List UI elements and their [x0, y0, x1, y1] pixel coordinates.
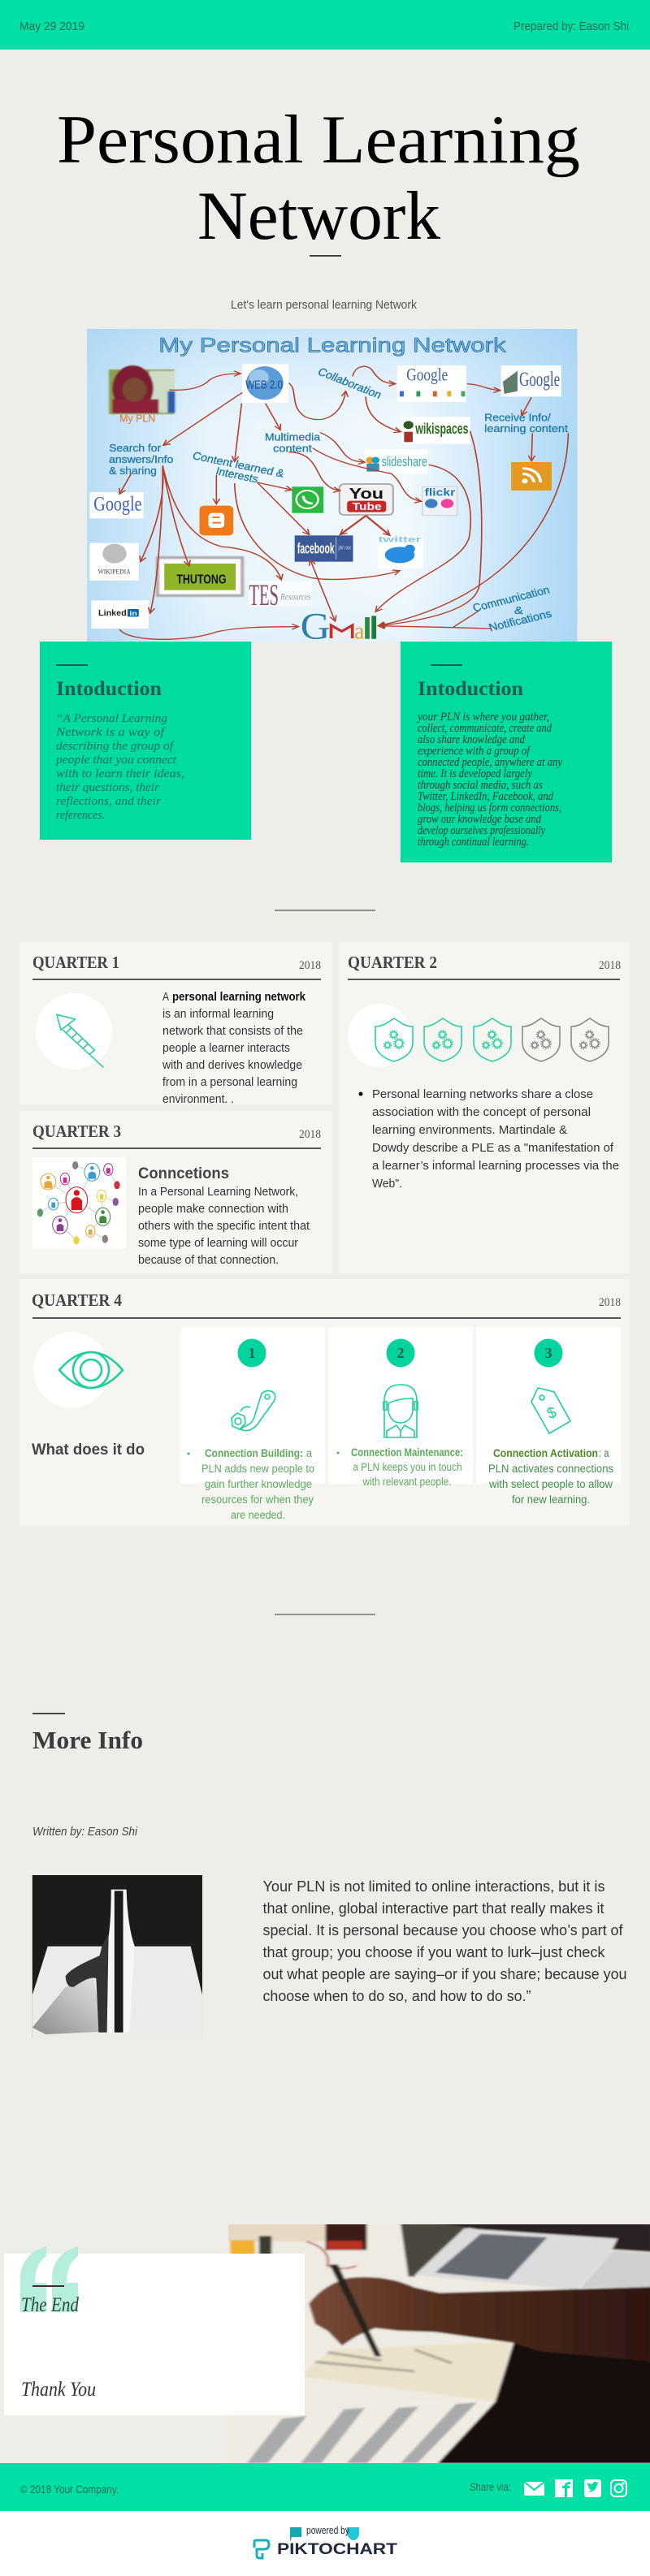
footer bar: Share via:: [470, 2480, 511, 2493]
logo tiles: Resources: [280, 591, 311, 602]
diagram title: My Personal Learning Network: [158, 334, 506, 357]
icon: facebook: [555, 2479, 573, 2497]
panel: quarter 3: some type of learning will occur: [138, 1236, 298, 1250]
panel: quarter 3: others with the specific intent that: [138, 1219, 310, 1233]
logo tiles: Google: [519, 369, 560, 391]
step 2: connection maintenance: 2: [396, 1345, 405, 1361]
diagram labels: Content learned &: [191, 451, 285, 480]
photo: hand writing at desk: [224, 2219, 650, 2466]
diagram: my personal learning network: [87, 329, 577, 647]
icon: instagram: [611, 2480, 626, 2496]
panel: quarter 2: 2018: [599, 959, 621, 972]
panel: introduction left: Network is a way of: [55, 726, 166, 739]
logo tiles: G: [301, 606, 330, 647]
logo tiles: in: [129, 610, 137, 618]
diagram labels: &: [514, 605, 523, 617]
panel: introduction right: blogs, helping us form connections,: [418, 802, 561, 815]
footer bar: © 2018 Your Company.: [20, 2483, 119, 2496]
panel: quarter 1: QUARTER 1: [32, 953, 119, 972]
header bar: May 29 2019: [20, 19, 84, 33]
panel: introduction left: reflections, and their: [56, 795, 161, 808]
logo tiles: flickr: [425, 486, 456, 498]
footer bar: [0, 2463, 650, 2511]
panel: introduction left: references.: [56, 809, 105, 822]
panel: introduction right: Twitter, LinkedIn, Facebook, and: [418, 790, 553, 803]
panel: quarter 2: Dowdy describe a PLE as a "manifestation of: [372, 1141, 614, 1155]
panel: introduction right: your PLN is where you gather,: [416, 711, 549, 724]
diagram labels: Receive Info/: [484, 413, 552, 424]
subtitle: Let's learn personal learning Network: [231, 299, 418, 312]
logo tiles: Google: [406, 365, 448, 385]
logo tiles: Google: [93, 493, 141, 516]
text block: more info quote: Your PLN is not limited to online interactions, but it is: [263, 1878, 604, 1895]
panel: introduction right: also share knowledge and: [418, 733, 525, 746]
icon: twitter: [584, 2479, 601, 2497]
step 1: connection building: are needed.: [231, 1509, 285, 1521]
panel: quarter 1: with and derives knowledge: [162, 1058, 302, 1072]
header bar: Prepared by: Eason Shi: [514, 19, 629, 33]
text block: more info quote: that group; you choose if you want to lurk–just check: [263, 1944, 605, 1960]
diagram labels: Collaboration: [315, 366, 384, 401]
panel: quarter 1: from in a personal learning: [162, 1075, 297, 1089]
step 1: connection building: a: [306, 1447, 312, 1459]
panel: introduction right: experience with a group of: [418, 745, 531, 758]
panel: quarter 4: What does it do: [32, 1441, 145, 1459]
diagram labels: Communication: [471, 585, 552, 615]
logo tiles: TES: [249, 578, 279, 612]
footer logo area: PIKTOCHART: [277, 2541, 397, 2558]
text block: more info quote: choose when to do so, and how to do so.”: [263, 1988, 531, 2004]
step 3: connection activation: : a: [599, 1447, 609, 1459]
panel: quarter 3: [20, 1111, 332, 1273]
step 3: connection activation: Connection Activation: [493, 1447, 598, 1459]
logo tiles: THUTONG: [176, 572, 227, 586]
text block: more info quote: special. It is personal because you choose who’s part of: [263, 1922, 623, 1938]
logo tiles: WEB 2.0: [245, 378, 283, 391]
panel: quarter 3: because of that connection.: [138, 1253, 279, 1267]
panel: quarter 3: QUARTER 3: [32, 1122, 121, 1141]
step 3: connection activation: with select people to allow: [488, 1478, 613, 1490]
diagram labels: learning content: [484, 423, 569, 435]
panel: introduction left: people that you connect: [55, 754, 177, 767]
panel: quarter 1: [20, 942, 332, 1106]
icon: people network: [32, 1157, 126, 1249]
panel: quarter 3: Conncetions: [138, 1165, 229, 1182]
text block: more info quote: out what people are saying–or if you share; because you: [263, 1966, 627, 1982]
step 3: connection activation: for new learning.: [512, 1493, 590, 1506]
panel: quarter 3: 2018: [299, 1128, 321, 1141]
logo tiles: wikispaces: [415, 421, 469, 437]
panel: quarter 2: Personal learning networks share a close: [372, 1087, 593, 1101]
step 3: connection activation: $: [544, 1404, 559, 1423]
panel: introduction right: collect, communicate, create and: [418, 722, 552, 735]
icon: rating shields: [375, 1018, 609, 1061]
step 1: connection building: [180, 1327, 325, 1521]
panel: quarter 2: QUARTER 2: [348, 953, 437, 972]
step 2: connection maintenance: Connection Maintenance:: [351, 1446, 463, 1459]
panel: quarter 1: A: [162, 990, 169, 1004]
step 2: connection maintenance: a PLN keeps you in touch: [353, 1461, 462, 1473]
panel: introduction right: through social media, such as: [418, 779, 543, 792]
step 3: connection activation: [476, 1327, 621, 1506]
closing card: [4, 2246, 305, 2415]
panel: quarter 3: people make connection with: [138, 1202, 288, 1216]
logo tiles: join our: [338, 544, 351, 551]
diagram labels: Notifications: [488, 608, 553, 634]
diagram labels: content: [273, 443, 313, 455]
diagram labels: Search for: [109, 443, 161, 455]
icon: eye: [59, 1352, 123, 1388]
panel: quarter 4: [20, 1279, 630, 1525]
title: Network: [197, 178, 440, 254]
logo tiles: slideshare: [382, 454, 427, 469]
title: Personal Learning: [57, 102, 580, 178]
closing card: Thank You: [21, 2379, 96, 2401]
logo tiles: Tube: [353, 501, 382, 513]
panel: introduction right: connected people, anywhere at any: [418, 756, 562, 769]
panel: quarter 3: In a Personal Learning Network,: [138, 1185, 298, 1199]
panel: introduction left: Intoduction: [56, 678, 162, 700]
byline: Written by: Eason Shi: [32, 1826, 138, 1839]
step 2: connection maintenance: with relevant people.: [362, 1476, 452, 1488]
panel: introduction right: develop ourselves professionally: [418, 824, 545, 837]
panel: quarter 1: environment. .: [162, 1092, 234, 1106]
step 1: connection building: Connection Building:: [205, 1447, 303, 1459]
diagram labels: answers/Info: [109, 454, 173, 466]
panel: quarter 2: [339, 942, 630, 1273]
logo tiles: twitter: [379, 535, 422, 544]
panel: introduction left: [40, 642, 251, 840]
logo tiles: WIKIPEDIA: [98, 568, 131, 575]
heading: more info: [32, 1713, 143, 1754]
panel: introduction right: time. It is developed largely: [418, 767, 532, 780]
logo tiles: a: [354, 618, 364, 645]
diagram arrows: [119, 366, 568, 639]
panel: quarter 1: personal learning network: [172, 990, 306, 1004]
logo tiles: [89, 364, 561, 647]
step 3: connection activation: PLN activates connections: [488, 1463, 613, 1475]
step 1: connection building: gain further knowledge: [205, 1478, 312, 1490]
text block: more info quote: [263, 1878, 627, 2004]
panel: introduction left: their questions, their: [56, 781, 159, 794]
panel: introduction left: with to learn their ideas,: [56, 767, 184, 780]
title: [57, 102, 580, 257]
footer logo area: [0, 2511, 650, 2576]
quote mark: [20, 2246, 78, 2312]
panel: quarter 4: 2018: [599, 1296, 621, 1309]
logo tiles: facebook: [297, 541, 335, 557]
panel: quarter 2: association with the concept of personal: [372, 1105, 591, 1119]
panel: quarter 2: learning environments. Martindale &: [372, 1123, 567, 1137]
panel: introduction right: through continual learning.: [418, 836, 529, 849]
text block: more info quote: that online, global interactive part that really makes it: [263, 1900, 604, 1917]
panel: quarter 2: a learner’s informal learning processes via the: [372, 1159, 619, 1173]
panel: introduction right: Intoduction: [418, 678, 523, 700]
step 1: connection building: resources for when they: [202, 1493, 314, 1506]
diagram labels: Multimedia: [265, 432, 321, 443]
panel: quarter 4: QUARTER 4: [32, 1290, 122, 1310]
panel: quarter 1: is an informal learning: [162, 1007, 274, 1021]
header bar: [0, 0, 650, 50]
logo tiles: Linked: [98, 609, 127, 618]
logo tiles: My PLN: [119, 413, 155, 424]
step 2: connection maintenance: [328, 1327, 473, 1488]
icon: mail: [524, 2482, 544, 2496]
panel: quarter 1: network that consists of the: [162, 1024, 303, 1038]
panel: introduction left: describing the group of: [56, 740, 175, 753]
logo tiles: You: [349, 486, 384, 502]
panel: quarter 1: 2018: [299, 959, 321, 972]
step 1: connection building: PLN adds new people to: [202, 1463, 314, 1475]
diagram labels: [109, 366, 569, 634]
footer logo area: powered by: [306, 2524, 349, 2536]
diagram labels: Interests: [214, 466, 259, 486]
step 3: connection activation: 3: [544, 1345, 552, 1361]
panel: introduction right: [401, 642, 612, 862]
panel: introduction right: grow our knowledge base and: [418, 813, 541, 826]
icon: rocket: [57, 1014, 103, 1067]
photo: architecture: [32, 1875, 202, 2038]
step 1: connection building: 1: [249, 1345, 255, 1361]
heading: more info: More Info: [32, 1726, 143, 1754]
panel: quarter 1: people a learner interacts: [162, 1041, 290, 1055]
closing card: The End: [21, 2294, 79, 2316]
panel: quarter 2: Web".: [372, 1177, 402, 1191]
diagram labels: & sharing: [109, 465, 157, 478]
panel: introduction left: “A Personal Learning: [56, 712, 168, 725]
